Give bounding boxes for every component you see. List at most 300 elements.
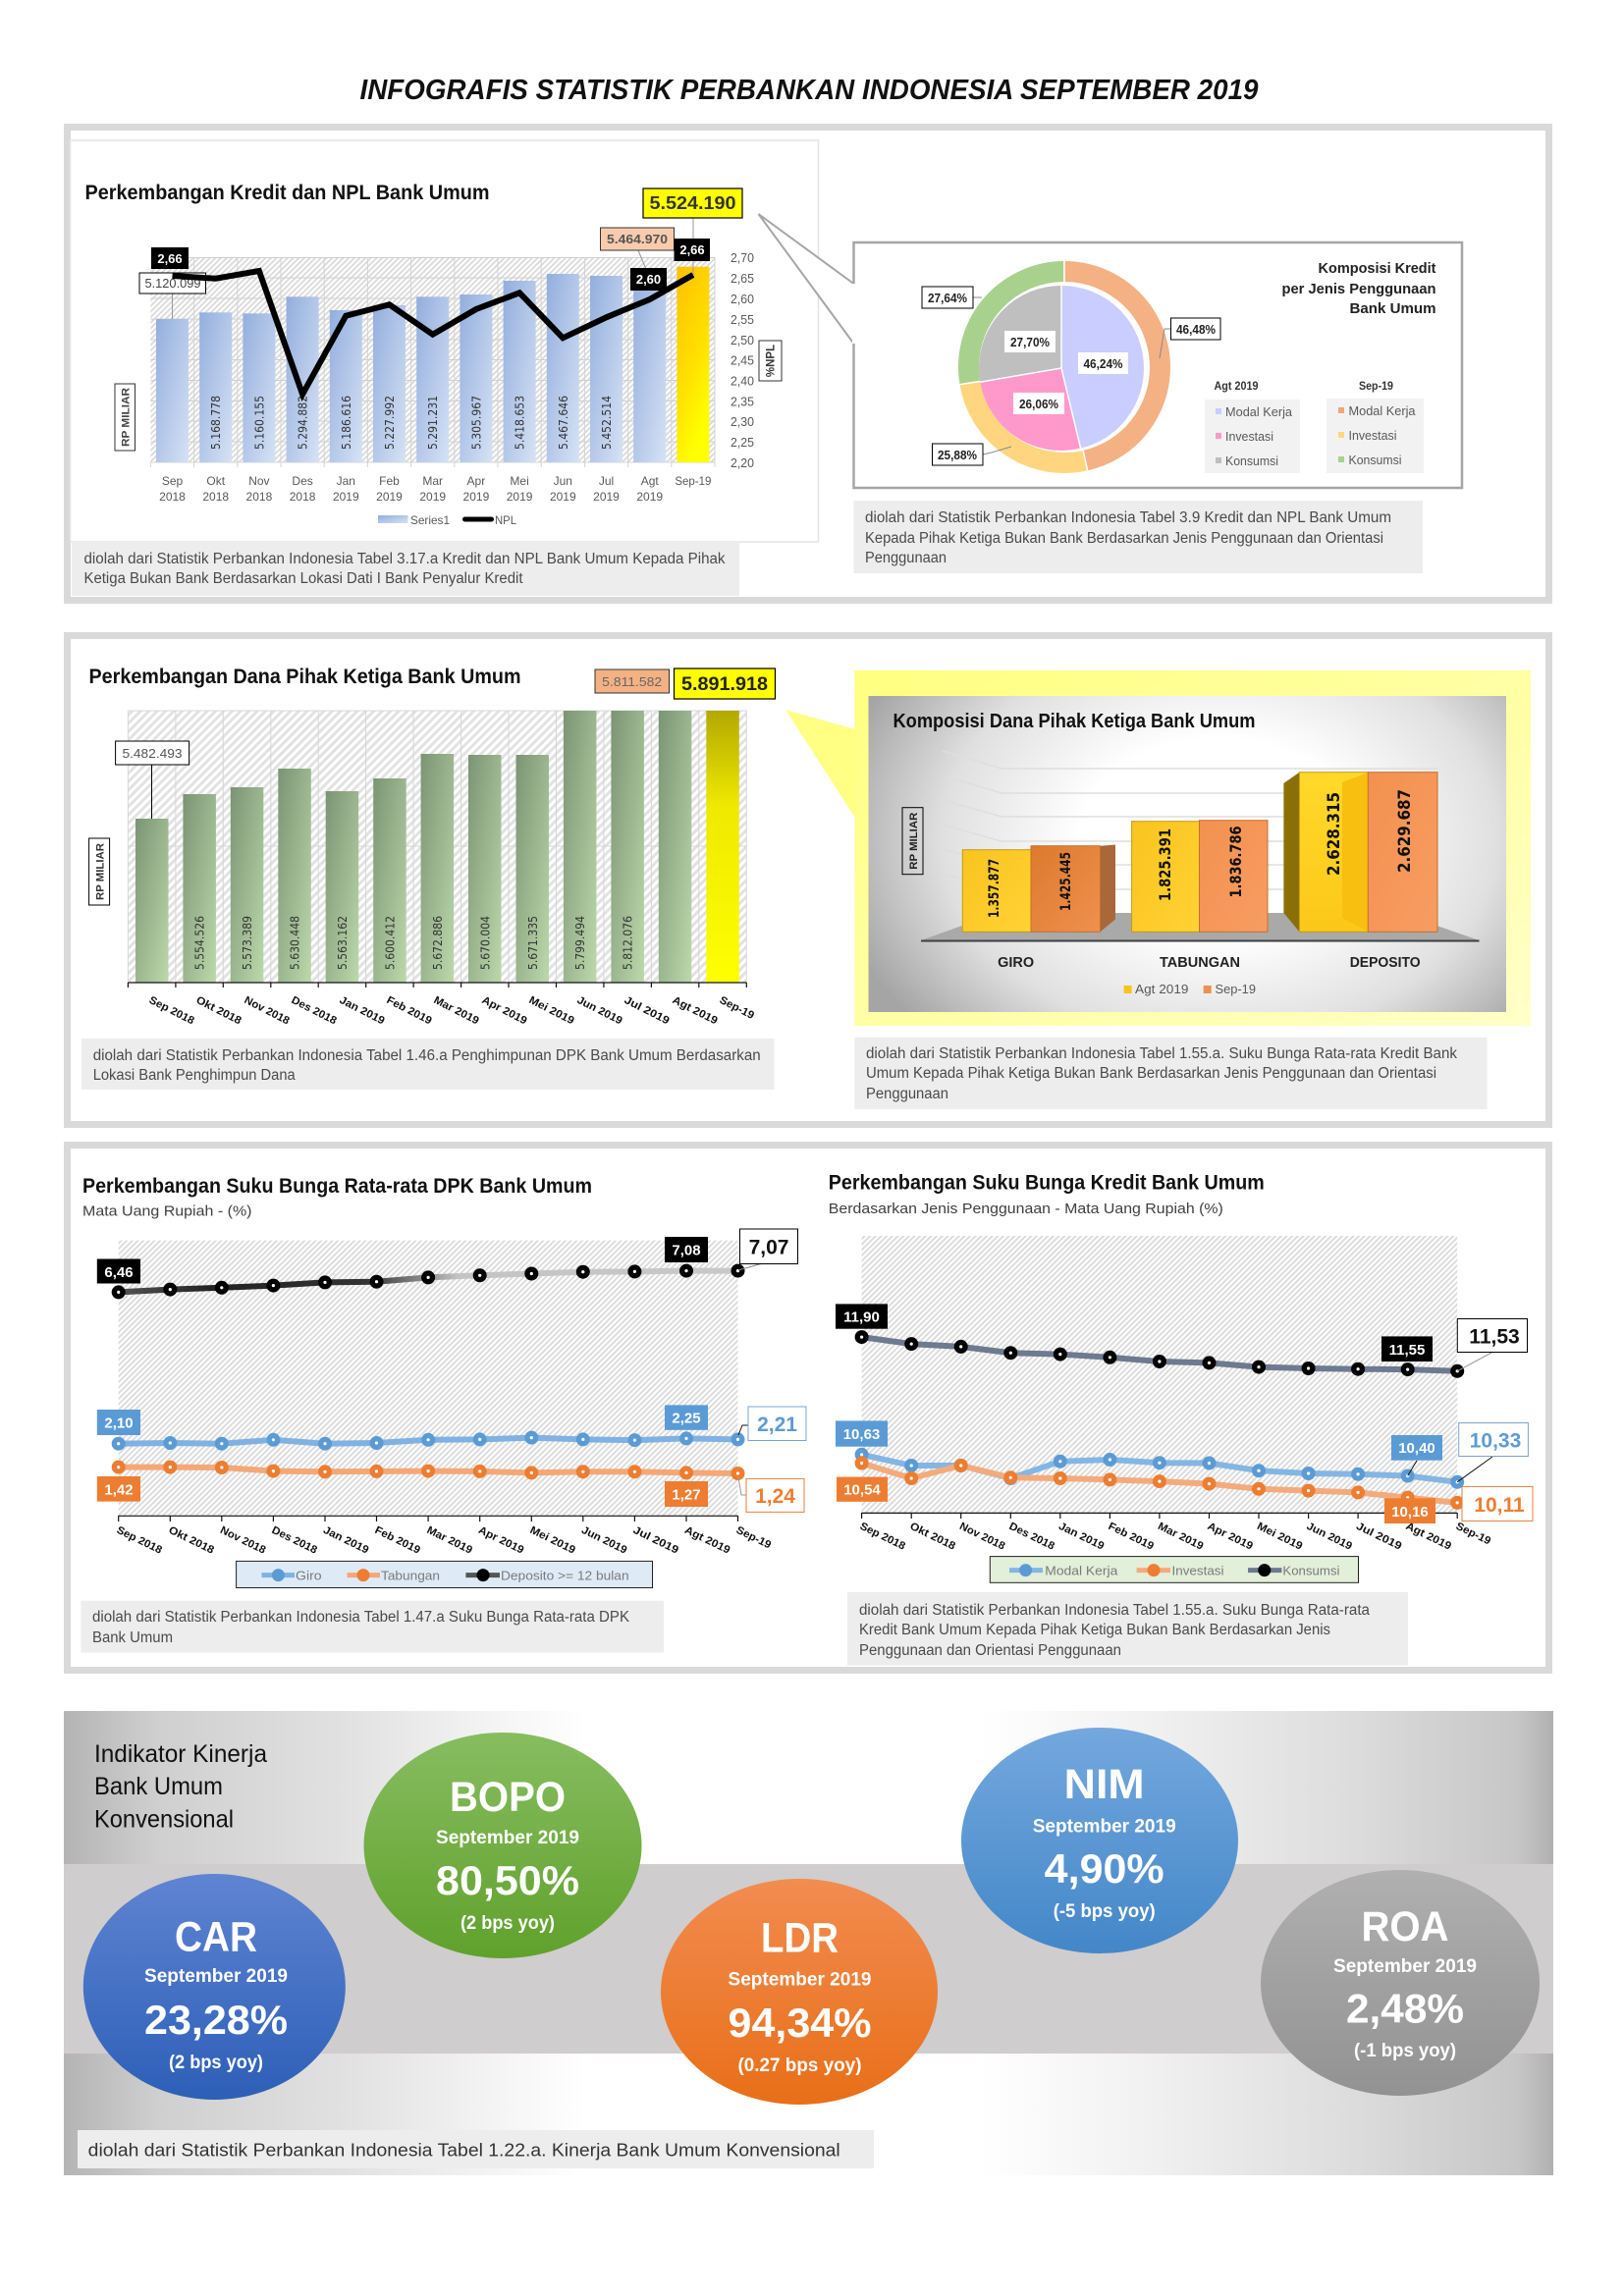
- chart heading: Komposisi Dana Pihak Ketiga Bank Umum: [893, 711, 1255, 732]
- x axis labels: Jan 2019: [338, 994, 387, 1027]
- x axis labels: Sep-19: [675, 474, 712, 488]
- x axis labels: Sep-19: [1454, 1521, 1492, 1547]
- bar value labels: 5.160.155: [251, 396, 266, 450]
- legend: Agt 2019: Investasi: [1225, 430, 1273, 444]
- callout wedge: yellow: [785, 710, 855, 818]
- bar value labels: 5.600.412: [382, 916, 397, 970]
- bar value labels: 1.825.391: [1156, 828, 1174, 901]
- chart heading: suku bunga kredit: Perkembangan Suku Bunga Kredit Bank Umum: [829, 1172, 1265, 1195]
- chart heading: Perkembangan Kredit dan NPL Bank Umum: [84, 182, 489, 204]
- right axis labels: 2,40: [731, 375, 754, 389]
- x axis labels: Sep 2018: [147, 994, 196, 1027]
- bar value labels: 5.563.162: [335, 916, 350, 970]
- bar value labels: 1.425.445: [1058, 852, 1074, 911]
- x axis labels: Jan 2019: [321, 1524, 370, 1557]
- axis title: RP MILIAR: RP MILIAR: [94, 843, 106, 900]
- label: 10,54: 10,54: [843, 1482, 881, 1498]
- x axis labels: Agt 2019: [671, 994, 720, 1027]
- label: 1,24: [746, 1478, 804, 1512]
- right axis labels: 2,25: [731, 436, 754, 450]
- right axis labels: 2,60: [731, 293, 754, 306]
- x axis labels: Mei: [510, 474, 529, 488]
- metric: LDR: September 2019: [729, 1970, 872, 1991]
- bar value labels: 5.467.646: [556, 396, 570, 450]
- label: 46,48%: 46,48%: [1176, 322, 1216, 337]
- label: 1,27: [665, 1481, 708, 1507]
- caption: komposisi DPK: [854, 1038, 1488, 1109]
- x axis labels: Sep: [162, 474, 183, 488]
- panel: komposisi DPK: [854, 670, 1531, 1026]
- label: 1,42: 1,42: [104, 1482, 134, 1498]
- plot background: [150, 257, 715, 467]
- leader lines: [1457, 1353, 1492, 1371]
- metric: LDR: [661, 1879, 938, 2105]
- right axis labels: 2,20: [731, 456, 754, 470]
- metric: NIM: NIM: [1064, 1761, 1145, 1808]
- callout: 5.524.190: [643, 188, 742, 218]
- x axis labels: 2019: [636, 490, 663, 504]
- axis title: RP MILIAR: RP MILIAR: [908, 813, 920, 870]
- label: 27,64%: [922, 287, 973, 308]
- pie leader lines: [973, 297, 1170, 454]
- legend: Sep-19: Sep-19: [1359, 381, 1393, 393]
- label: 11,90: 11,90: [843, 1309, 880, 1325]
- metric: NIM: [961, 1728, 1238, 1953]
- legend: Agt 2019: Konsumsi: [1225, 454, 1278, 468]
- metric: NIM: (-5 bps yoy): [1054, 1901, 1156, 1922]
- metric: BOPO: [363, 1733, 642, 1958]
- legend: Sep-19: Modal Kerja: [1349, 404, 1416, 418]
- x axis labels: Jul 2019: [1354, 1521, 1403, 1553]
- chart legend: Investasi: [1172, 1563, 1224, 1578]
- caption: komposisi DPK: diolah dari Statistik Perbankan Indonesia Tabel 1.55.a. Suku Bunga Rata-rata Kredit Bank: [866, 1045, 1457, 1062]
- label: 7,07: [740, 1229, 797, 1264]
- bar chart: DPK: [89, 711, 756, 1027]
- x axis labels: Sep 2018: [115, 1524, 164, 1557]
- x axis labels: Mar: [422, 474, 443, 488]
- label: 26,06%: 26,06%: [1019, 397, 1058, 411]
- callout: 5.482.493: 5.482.493: [122, 747, 183, 761]
- label: 10,40: 10,40: [1398, 1440, 1435, 1457]
- x axis labels: Okt 2018: [908, 1521, 957, 1553]
- x axis labels: Jul: [599, 474, 614, 488]
- caption: komposisi DPK: Umum Kepada Pihak Ketiga Bukan Bank Berdasarkan Jenis Penggunaan dan Orientasi: [866, 1065, 1436, 1082]
- x axis labels: Jun 2019: [579, 1524, 628, 1557]
- metric: NIM: 4,90%: [1045, 1845, 1164, 1892]
- x axis labels: Nov: [248, 474, 270, 488]
- bars: [135, 711, 739, 983]
- x axis labels: Feb 2019: [385, 994, 434, 1027]
- label: 27,64%: 27,64%: [928, 291, 967, 305]
- x axis labels: Nov 2018: [243, 994, 292, 1027]
- chart heading: suku bunga DPK: Perkembangan Suku Bunga Rata-rata DPK Bank Umum: [82, 1175, 592, 1198]
- caption: komposisi kredit: Kepada Pihak Ketiga Bukan Bank Berdasarkan Jenis Penggunaan dan Orientasi: [865, 530, 1383, 547]
- label: 2,21: 2,21: [757, 1414, 797, 1436]
- x axis labels: [858, 1521, 1492, 1553]
- x axis labels: Jun 2019: [575, 994, 624, 1027]
- x axis labels: Jul 2019: [623, 994, 672, 1027]
- axis title: %NPL: [759, 341, 782, 381]
- label: 11,53: 11,53: [1469, 1325, 1520, 1349]
- chart legend: Sep-19: [1216, 982, 1256, 996]
- composition heading: Komposisi Kredit: [1318, 261, 1436, 277]
- legend: Sep-19: Investasi: [1349, 429, 1396, 443]
- chart heading: Perkembangan Dana Pihak Ketiga Bank Umum: [88, 666, 520, 688]
- chart legend: Modal Kerja: [1045, 1563, 1118, 1578]
- callout: 5.524.190: 5.524.190: [650, 193, 736, 213]
- bar value labels: 5.573.389: [240, 916, 254, 970]
- x axis labels: Okt 2018: [167, 1524, 216, 1557]
- label: 27,70%: 27,70%: [1010, 335, 1050, 349]
- gridlines: [943, 751, 1437, 889]
- bar value labels: 1.836.786: [1226, 827, 1245, 897]
- metric: ROA: ROA: [1361, 1903, 1449, 1950]
- metric: BOPO: September 2019: [436, 1828, 579, 1848]
- label: 7,08: 7,08: [672, 1243, 701, 1258]
- label: 46,24%: 46,24%: [1084, 356, 1123, 371]
- x axis labels: Mei 2019: [527, 994, 576, 1027]
- metric: BOPO: (2 bps yoy): [460, 1913, 555, 1934]
- x axis labels: Agt 2019: [1404, 1521, 1453, 1553]
- metric: ROA: (-1 bps yoy): [1354, 2041, 1456, 2061]
- series: investasi: [862, 1463, 1457, 1503]
- label: 46,24%: [1078, 352, 1128, 374]
- x axis labels: 2018: [159, 490, 186, 504]
- chart legend: Tabungan: [381, 1569, 440, 1582]
- bars: kredit: [156, 267, 709, 462]
- bar value labels: 5.168.778: [208, 396, 223, 450]
- chart legend: [1124, 982, 1256, 996]
- x axis labels: Jul 2019: [631, 1524, 680, 1557]
- label: 27,70%: [1004, 331, 1056, 352]
- x axis labels: 2019: [376, 490, 403, 504]
- metric: ROA: 2,48%: [1346, 1986, 1464, 2032]
- chart legend: Agt 2019: [1135, 982, 1188, 996]
- x axis labels: Mei 2019: [528, 1524, 577, 1557]
- x axis labels: [159, 474, 712, 504]
- legend: Sep-19: Konsumsi: [1349, 454, 1402, 467]
- x axis labels: 2018: [202, 490, 229, 504]
- label: 10,33: 10,33: [1470, 1429, 1521, 1453]
- callout: 5.891.918: 5.891.918: [681, 674, 768, 695]
- callout: 5.811.582: 5.811.582: [602, 675, 662, 689]
- label: 7,08: [665, 1237, 708, 1262]
- metric: NIM: September 2019: [1033, 1817, 1176, 1838]
- x axis labels: Agt 2019: [682, 1524, 731, 1557]
- x axis labels: Feb 2019: [373, 1524, 422, 1557]
- metric: CAR: 23,28%: [144, 1997, 288, 2043]
- bar value labels: 5.672.886: [430, 916, 445, 970]
- x axis labels: Des 2018: [290, 994, 339, 1027]
- x axis labels: [147, 994, 756, 1027]
- bar value labels: [208, 396, 614, 450]
- x axis labels: 2019: [593, 490, 620, 504]
- x axis labels: Jun: [554, 474, 572, 488]
- heading: indikator kinerja: Indikator Kinerja: [94, 1740, 267, 1768]
- chart legend: Konsumsi: [1282, 1563, 1340, 1578]
- x axis labels: 2019: [419, 490, 446, 504]
- caption: kinerja: diolah dari Statistik Perbankan Indonesia Tabel 1.22.a. Kinerja Bank Umum Konvensional: [88, 2141, 840, 2161]
- axis title: RP MILIAR: RP MILIAR: [120, 388, 132, 447]
- axis line: [862, 1513, 1457, 1519]
- x axis labels: Mar 2019: [432, 994, 481, 1027]
- caption: DPK: [81, 1039, 774, 1090]
- label: 10,11: 10,11: [1474, 1494, 1525, 1517]
- right axis labels: 2,70: [731, 251, 754, 265]
- bar value labels: [192, 916, 635, 970]
- x axis labels: Nov 2018: [218, 1524, 267, 1557]
- bar value labels: 5.630.448: [287, 916, 302, 970]
- callout: 5.482.493: [116, 741, 189, 819]
- label: 10,16: [1384, 1498, 1435, 1523]
- axis title: RP MILIAR: [89, 838, 110, 905]
- leader lines: [738, 1264, 761, 1270]
- caption: DPK: diolah dari Statistik Perbankan Indonesia Tabel 1.46.a Penghimpunan DPK Bank Umum Berdasarkan: [93, 1047, 761, 1064]
- heading: indikator kinerja: [94, 1740, 267, 1834]
- x axis labels: Apr 2019: [476, 1524, 525, 1557]
- caption: suku bunga DPK: diolah dari Statistik Perbankan Indonesia Tabel 1.47.a Suku Bunga Rata-rata DPK: [92, 1609, 630, 1626]
- metric: CAR: (2 bps yoy): [169, 2053, 263, 2073]
- bar value labels: 5.291.231: [425, 396, 440, 450]
- caption: komposisi DPK: Penggunaan: [866, 1086, 948, 1102]
- right axis labels: 2,50: [731, 334, 754, 347]
- bar value labels: 5.812.076: [621, 916, 635, 970]
- bar value labels: 2.628.315: [1325, 792, 1343, 876]
- caption: kredit dan NPL: diolah dari Statistik Perbankan Indonesia Tabel 3.17.a Kredit dan NPL Bank Umum Kepada Pihak: [84, 551, 726, 567]
- bar value labels: [987, 789, 1414, 918]
- callout: 2,66 right: 2,66: [679, 242, 705, 257]
- chart subheading: kredit: Berdasarkan Jenis Penggunaan - Mata Uang Rupiah (%): [829, 1201, 1223, 1217]
- composition heading: Bank Umum: [1349, 301, 1435, 317]
- legend: Agt 2019: Modal Kerja: [1225, 405, 1292, 419]
- x axis labels: Nov 2018: [957, 1521, 1006, 1553]
- title: INFOGRAFIS STATISTIK PERBANKAN INDONESIA SEPTEMBER 2019: [359, 75, 1259, 106]
- caption: suku bunga kredit: Kredit Bank Umum Kepada Pihak Ketiga Bukan Bank Berdasarkan Jenis: [859, 1622, 1330, 1638]
- series: tabungan: [119, 1468, 737, 1473]
- label: 25,88%: [933, 444, 983, 465]
- category labels: TABUNGAN: [1160, 955, 1240, 971]
- metric: CAR: [83, 1874, 346, 2100]
- metric: CAR: CAR: [175, 1914, 257, 1961]
- x axis labels: 2019: [550, 490, 576, 504]
- bar value labels: 2.629.687: [1395, 789, 1414, 873]
- caption: suku bunga kredit: diolah dari Statistik Perbankan Indonesia Tabel 1.55.a. Suku Bunga Rata-rata: [859, 1602, 1370, 1619]
- metric: LDR: 94,34%: [729, 2000, 872, 2046]
- label: 11,55: [1381, 1336, 1433, 1362]
- composition heading: per Jenis Penggunaan: [1282, 282, 1435, 297]
- panel: indikator kinerja: [64, 1711, 1553, 2175]
- series: giro: [119, 1438, 737, 1444]
- x axis labels: Jun 2019: [1305, 1521, 1354, 1553]
- metric: ROA: September 2019: [1333, 1956, 1477, 1977]
- label: 10,63: [836, 1420, 888, 1447]
- label: 11,90: [836, 1304, 888, 1329]
- x axis labels: Sep-19: [718, 994, 756, 1022]
- caption: suku bunga DPK: [81, 1601, 664, 1653]
- axis title: %NPL: %NPL: [766, 345, 778, 377]
- axis title: RP MILIAR: [902, 808, 923, 875]
- x axis labels: 2018: [246, 490, 273, 504]
- label: 1,24: 1,24: [755, 1485, 795, 1508]
- caption: suku bunga kredit: [847, 1592, 1408, 1665]
- label: 6,46: 6,46: [104, 1264, 134, 1281]
- panel: kredit dan NPL: [67, 128, 1549, 601]
- donut: outer ring Sep-19: [968, 271, 1161, 463]
- NPL line: [173, 271, 693, 395]
- right axis labels: 2,35: [731, 395, 754, 408]
- label: 2,10: [97, 1410, 140, 1435]
- x axis labels: Jan: [337, 474, 355, 488]
- label: 25,88%: 25,88%: [938, 448, 977, 462]
- x axis labels: Feb: [379, 474, 400, 488]
- bar value labels: 5.670.004: [477, 916, 492, 970]
- x axis labels: Okt 2018: [194, 994, 244, 1027]
- callout: 5.464.970: 5.464.970: [607, 232, 668, 246]
- heading: indikator kinerja: Bank Umum: [94, 1773, 223, 1800]
- x axis labels: Feb 2019: [1107, 1521, 1156, 1553]
- label: 10,16: 10,16: [1391, 1504, 1429, 1521]
- caption: DPK: Lokasi Bank Penghimpun Dana: [93, 1067, 296, 1084]
- callout: 5.120.099: [139, 273, 206, 294]
- label: 10,33: [1459, 1423, 1528, 1457]
- bar value labels: 5.799.494: [572, 916, 587, 970]
- label: 46,48%: [1170, 318, 1220, 340]
- series: konsumsi: [862, 1337, 1457, 1371]
- category labels: DEPOSITO: [1350, 955, 1421, 971]
- right axis labels: 2,45: [731, 353, 754, 367]
- caption: komposisi kredit: [854, 501, 1423, 573]
- chart legend: Deposito >= 12 bulan: [501, 1569, 629, 1582]
- label: 7,07: 7,07: [749, 1237, 788, 1258]
- label: 11,53: [1457, 1319, 1528, 1353]
- x axis labels: Mar 2019: [1156, 1521, 1205, 1553]
- axis line: [119, 1516, 737, 1522]
- label: 1,42: [97, 1476, 140, 1502]
- callout arrow and composition box: [758, 214, 1462, 488]
- axis title: RP MILIAR: [115, 384, 135, 451]
- chart legend: [990, 1557, 1359, 1582]
- series: deposito: [119, 1271, 737, 1292]
- legend: Agt 2019: [1205, 381, 1300, 473]
- x axis labels: 2018: [290, 490, 316, 504]
- bar value labels: 5.305.967: [468, 396, 483, 450]
- x axis labels: [115, 1524, 773, 1557]
- x axis labels: Des: [292, 474, 313, 488]
- pie: inner Agt 2019: [1020, 327, 1103, 409]
- label: 6,46: [97, 1258, 140, 1284]
- chart legend: Series1: [410, 513, 450, 527]
- bars: tabungan: [1132, 821, 1268, 932]
- callout: 5.464.970: [601, 228, 674, 250]
- callout: 2,66 left: [151, 247, 189, 269]
- chart legend: NPL: [495, 513, 516, 527]
- chart: perkembangan kredit dan NPL: [71, 140, 819, 542]
- chart legend: [237, 1561, 652, 1588]
- callout: 2,60: [630, 268, 667, 291]
- x axis labels: Okt: [206, 474, 226, 488]
- callout: 2,60: 2,60: [636, 272, 661, 287]
- label: 1,27: 1,27: [672, 1486, 701, 1504]
- chart legend: Giro: [296, 1569, 322, 1582]
- metric: BOPO: BOPO: [450, 1774, 566, 1821]
- x axis labels: Mar 2019: [425, 1524, 474, 1557]
- category labels: GIRO: [998, 955, 1034, 971]
- chart legend: [378, 513, 516, 527]
- bars: deposito: [1283, 773, 1437, 932]
- right axis labels: 2,30: [731, 415, 754, 429]
- metric: BOPO: 80,50%: [436, 1857, 579, 1903]
- x axis labels: 2019: [507, 490, 533, 504]
- metric: CAR: September 2019: [144, 1966, 288, 1987]
- callout: 5.891.918: [674, 668, 776, 699]
- composition heading: [1282, 261, 1436, 317]
- x axis labels: Apr 2019: [1206, 1521, 1255, 1553]
- bar value labels: 5.294.882: [296, 396, 310, 450]
- label: 10,11: [1462, 1486, 1533, 1521]
- label: 10,54: [837, 1477, 888, 1502]
- metric: ROA: [1261, 1870, 1540, 2096]
- x axis labels: 2019: [333, 490, 359, 504]
- metric: LDR: LDR: [761, 1914, 839, 1961]
- label: 2,10: 2,10: [104, 1415, 134, 1431]
- x axis labels: Sep 2018: [858, 1521, 907, 1553]
- x axis labels: Des 2018: [1007, 1521, 1056, 1553]
- caption: kinerja: [78, 2130, 874, 2168]
- caption: suku bunga kredit: Penggunaan dan Orientasi Penggunaan: [859, 1642, 1121, 1659]
- callout: 2,66 left: 2,66: [157, 251, 183, 266]
- chart subheading: DPK: Mata Uang Rupiah - (%): [82, 1203, 252, 1219]
- panel: dana pihak ketiga: [67, 636, 1549, 1125]
- x axis labels: Des 2018: [270, 1524, 319, 1557]
- bar value labels: 5.186.616: [339, 396, 353, 450]
- metric: LDR: (0.27 bps yoy): [738, 2056, 862, 2076]
- leader lines: [173, 218, 693, 319]
- legend: Agt 2019: Agt 2019: [1214, 381, 1259, 393]
- legend: Sep-19: [1326, 381, 1424, 473]
- bar value labels: 5.227.992: [382, 396, 397, 450]
- x axis labels: 2019: [463, 490, 490, 504]
- label: 10,40: [1391, 1435, 1442, 1461]
- label: 2,25: 2,25: [672, 1410, 701, 1427]
- axis line: [128, 983, 746, 988]
- callout: 5.120.099: 5.120.099: [145, 277, 201, 291]
- label: 2,25: [665, 1405, 708, 1430]
- category labels: [998, 955, 1421, 971]
- x axis labels: Apr: [467, 474, 485, 488]
- label: 10,63: 10,63: [843, 1426, 880, 1443]
- bar value labels: 1.357.877: [987, 859, 1002, 918]
- heading: indikator kinerja: Konvensional: [94, 1806, 234, 1834]
- panel: suku bunga: [67, 1145, 1549, 1671]
- x axis labels: Mei 2019: [1255, 1521, 1304, 1553]
- x axis labels: Apr 2019: [480, 994, 529, 1027]
- callout: 2,66 right: [674, 239, 710, 261]
- label: 11,55: 11,55: [1389, 1342, 1425, 1359]
- 3D floor: [921, 913, 1479, 940]
- bars: giro: [962, 844, 1115, 932]
- caption: komposisi kredit: Penggunaan: [865, 550, 947, 566]
- bar value labels: 5.418.653: [513, 396, 527, 450]
- right axis labels: [731, 251, 754, 470]
- label: 2,21: [748, 1407, 806, 1441]
- caption: komposisi kredit: diolah dari Statistik Perbankan Indonesia Tabel 3.9 Kredit dan NPL Bank Umum: [865, 509, 1391, 526]
- bar value labels: 5.554.526: [192, 916, 207, 970]
- x axis labels: Sep-19: [734, 1524, 773, 1551]
- right axis labels: 2,65: [731, 272, 754, 286]
- series: modal kerja: [862, 1455, 1457, 1482]
- caption: suku bunga DPK: Bank Umum: [92, 1629, 173, 1646]
- label: 26,06%: [1013, 393, 1064, 414]
